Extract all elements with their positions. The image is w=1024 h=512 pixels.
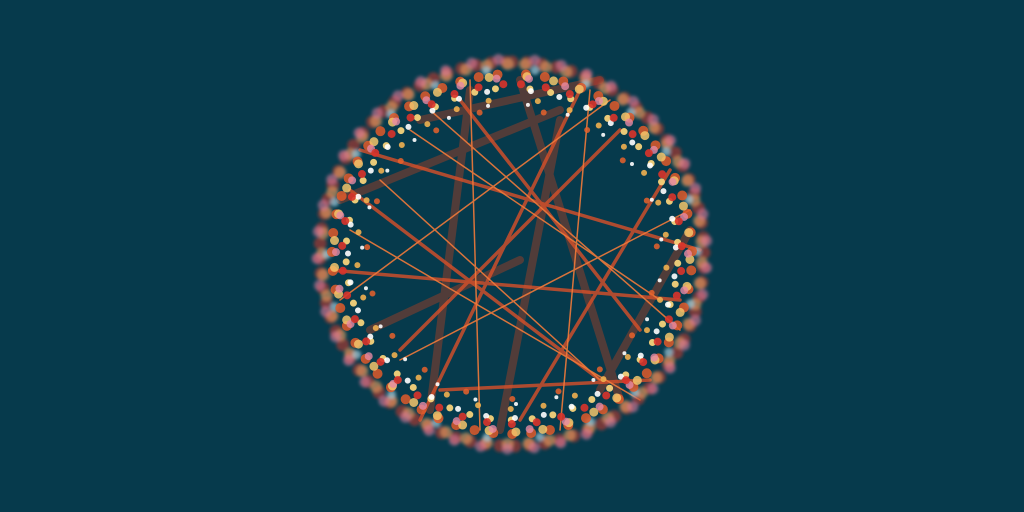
dot ring <box>317 59 707 449</box>
connection lines <box>330 80 700 430</box>
